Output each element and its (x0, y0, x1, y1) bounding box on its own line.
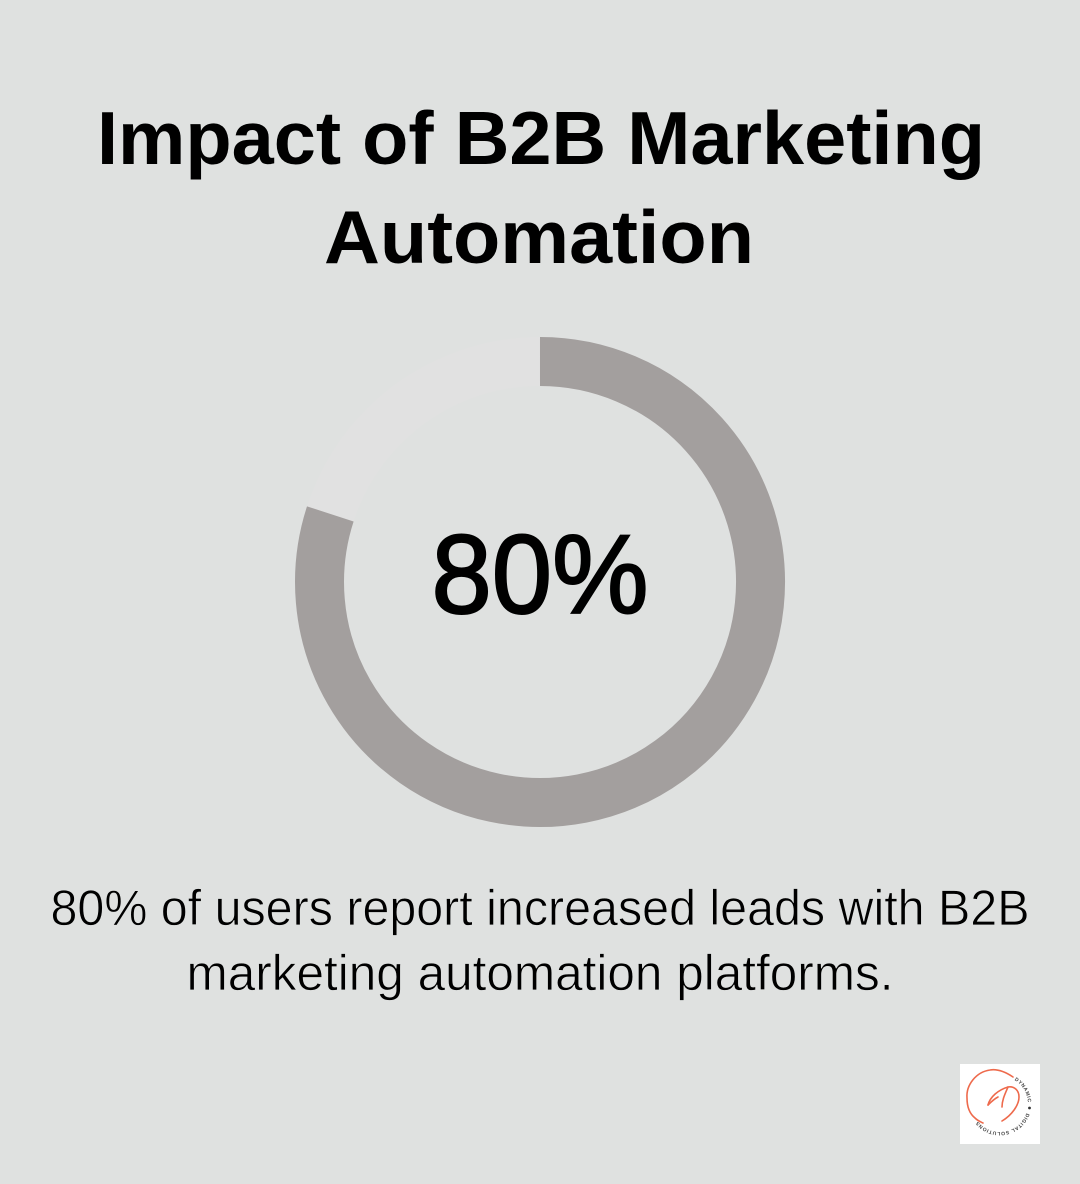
logo badge: DIGITAL SOLUTIONS (976, 1113, 1030, 1136)
title (97, 96, 985, 279)
title: Automation (324, 195, 754, 279)
logo swirl (967, 1070, 1019, 1123)
description text: marketing automation platforms. (186, 945, 894, 1001)
donut centre value: 80% (432, 512, 648, 637)
title: Impact of B2B Marketing (97, 96, 985, 180)
description text (50, 880, 1030, 1001)
logo ring text: DYNAMIC (1014, 1077, 1032, 1102)
donut chart: 80 percent (320, 362, 761, 802)
logo dot (1028, 1107, 1031, 1109)
logo badge (960, 1064, 1040, 1144)
description text: 80% of users report increased leads with B2B (50, 880, 1030, 936)
